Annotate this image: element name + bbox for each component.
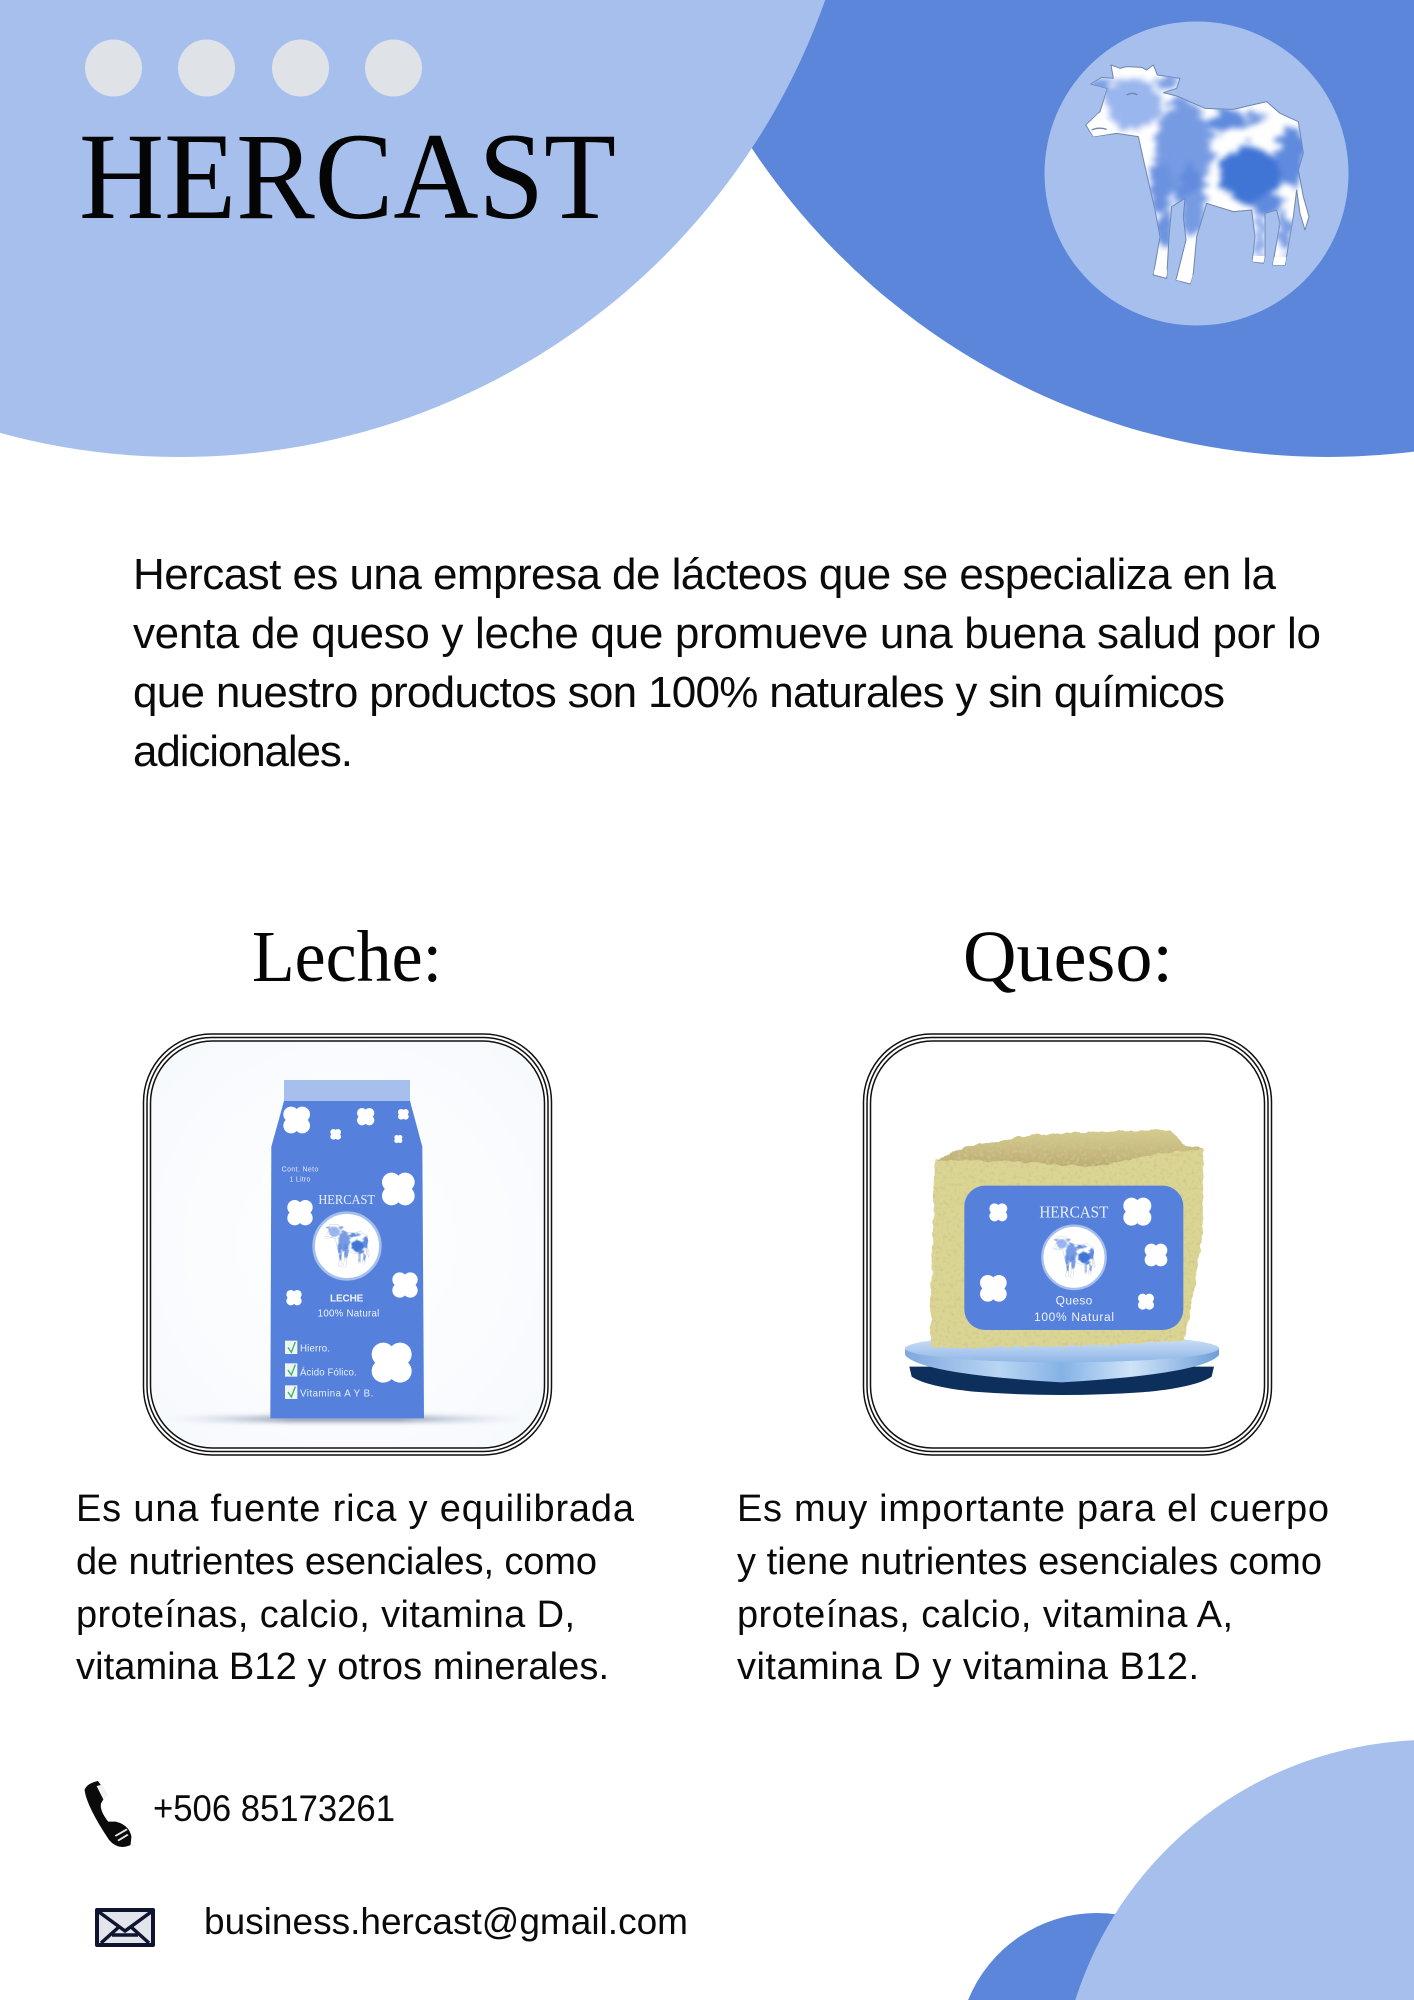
label product name bbox=[1034, 1293, 1114, 1324]
milk description: de nutrientes esenciales, como bbox=[76, 1541, 597, 1583]
carton checklist: Ácido Fólico. bbox=[300, 1367, 357, 1378]
milk description bbox=[76, 1488, 635, 1688]
milk description: Es una fuente rica y equilibrada bbox=[76, 1488, 635, 1530]
carton checklist: Hierro. bbox=[300, 1343, 330, 1354]
carton checklist bbox=[285, 1341, 373, 1399]
intro paragraph bbox=[133, 550, 1321, 776]
header shape: light blue bbox=[0, 0, 825, 457]
frame: milk bbox=[144, 1034, 552, 1455]
plate bbox=[905, 1334, 1219, 1382]
milk carton bbox=[270, 1080, 424, 1418]
cheese description: vitamina D y vitamina B12. bbox=[737, 1646, 1199, 1688]
logo: cow in circle bbox=[1044, 22, 1348, 326]
title: HERCAST bbox=[79, 108, 616, 245]
cheese block bbox=[930, 1129, 1203, 1348]
milk description: vitamina B12 y otros minerales. bbox=[76, 1646, 609, 1688]
carton checklist: Vitamina A Y B. bbox=[300, 1388, 373, 1399]
carton small label: Cont. Neto bbox=[282, 1166, 318, 1173]
cheese description: proteínas, calcio, vitamina A, bbox=[737, 1594, 1233, 1636]
icon: telephone bbox=[85, 1781, 131, 1847]
carton small label: 1 Litro bbox=[290, 1176, 310, 1183]
corner shape: dark blue bbox=[968, 1913, 1226, 2000]
label product name: 100% Natural bbox=[1034, 1310, 1114, 1324]
carton product name bbox=[318, 1294, 379, 1319]
email address: business.hercast@gmail.com bbox=[204, 1901, 688, 1942]
four decorative dots bbox=[85, 40, 422, 96]
carton product name: 100% Natural bbox=[318, 1308, 379, 1319]
heading: Leche: Leche: bbox=[252, 916, 442, 997]
cheese on plate bbox=[905, 1129, 1219, 1395]
clouds on carton bbox=[283, 1107, 418, 1383]
intro paragraph: adicionales. bbox=[133, 727, 353, 776]
label product name: Queso bbox=[1056, 1293, 1093, 1307]
carton product name: LECHE bbox=[330, 1294, 364, 1305]
cheese label bbox=[964, 1186, 1183, 1330]
floor shadow bbox=[165, 1416, 525, 1422]
carton brand: HERCAST bbox=[318, 1192, 375, 1207]
frame: cheese bbox=[864, 1034, 1272, 1455]
cheese description: Es muy importante para el cuerpo bbox=[737, 1488, 1329, 1530]
panel: milk carton bbox=[144, 1034, 552, 1455]
label cow badge bbox=[1042, 1226, 1106, 1289]
intro paragraph: que nuestro productos son 100% naturales y sin químicos bbox=[133, 668, 1225, 717]
panel: cheese bbox=[864, 1034, 1272, 1455]
clouds on label bbox=[980, 1198, 1167, 1310]
intro paragraph: venta de queso y leche que promueve una buena salud por lo bbox=[133, 609, 1321, 658]
corner shape: light blue bbox=[1075, 1740, 1414, 2000]
intro paragraph: Hercast es una empresa de lácteos que se especializa en la bbox=[133, 550, 1277, 599]
carton cow badge bbox=[314, 1213, 380, 1279]
plate base bbox=[909, 1367, 1214, 1395]
label brand: HERCAST bbox=[1039, 1202, 1108, 1221]
milk description: proteínas, calcio, vitamina D, bbox=[76, 1594, 575, 1636]
phone number: +506 85173261 bbox=[153, 1788, 395, 1829]
cheese description: y tiene nutrientes esenciales como bbox=[737, 1541, 1322, 1583]
cheese description bbox=[737, 1488, 1329, 1688]
heading: Queso: Queso: bbox=[963, 916, 1173, 997]
carton small label bbox=[282, 1166, 318, 1183]
icon: envelope bbox=[95, 1908, 155, 1947]
header shape: dark blue bbox=[677, 0, 1414, 457]
